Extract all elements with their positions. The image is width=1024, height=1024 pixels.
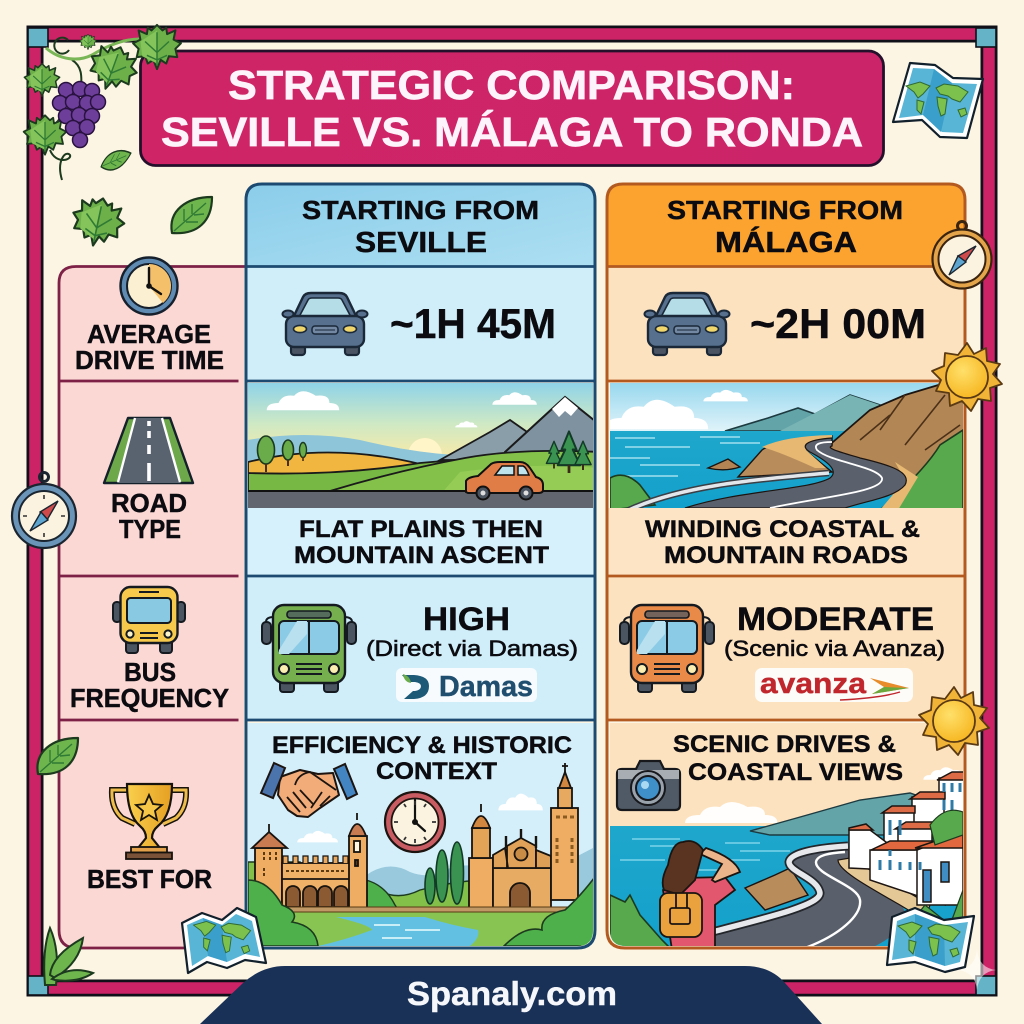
caption: flat plains then mountain ascent — [294, 516, 549, 569]
icon: camera — [617, 761, 680, 810]
icon: green bus — [262, 605, 356, 692]
scene: plains and mountains — [248, 383, 600, 508]
icon: yellow bus — [113, 587, 185, 653]
caption: scenic drives and coastal views: SCENIC DRIVES & — [673, 731, 896, 758]
heading: starting from Málaga: MÁLAGA — [715, 225, 857, 259]
panel: starting from Málaga — [605, 184, 970, 951]
icon: folded map bottom right — [887, 908, 974, 972]
value: moderate bus frequency: MODERATE — [737, 601, 934, 637]
icon: folded map top right — [893, 63, 983, 138]
row label: average drive time — [75, 321, 224, 375]
trees — [425, 842, 464, 904]
row label: bus frequency: FREQUENCY — [70, 685, 229, 713]
caption: winding coastal and mountain roads — [645, 516, 920, 569]
icon: grape leaf — [68, 193, 128, 251]
grape vine corner decoration — [24, 25, 181, 180]
value: moderate bus frequency: (Scenic via Avanza) — [724, 636, 945, 661]
value: high bus frequency: HIGH — [423, 601, 510, 637]
row labels panel — [59, 266, 245, 948]
scene: coastal viewpoint — [610, 723, 968, 951]
icon: clock — [120, 258, 178, 314]
footer: brand banner: Spanaly.com — [407, 975, 617, 1012]
icon: orange car — [466, 462, 543, 500]
heading: starting from Málaga — [667, 195, 903, 259]
icon: trophy — [112, 784, 186, 859]
icon: sun lower — [919, 687, 989, 755]
heading: starting from Seville: STARTING FROM — [302, 195, 539, 225]
icon: compass right — [932, 222, 992, 288]
logo: Damas — [396, 668, 537, 703]
icon: leaf on frame — [37, 738, 78, 774]
caption: efficiency and historic context: CONTEXT — [376, 758, 497, 785]
caption: scenic drives and coastal views: COASTAL VIEWS — [688, 759, 903, 786]
caption: scenic drives and coastal views — [673, 731, 903, 786]
icon: red clock — [385, 792, 445, 852]
landmark: palace with towers — [252, 813, 367, 908]
icon: orange bus — [620, 605, 714, 692]
row label: road type — [111, 490, 187, 544]
figure: traveller looking at the view — [660, 841, 740, 950]
heading: starting from Málaga: STARTING FROM — [667, 195, 903, 225]
title banner — [140, 51, 884, 166]
icon: road — [104, 418, 193, 483]
icon: leaves bottom left — [44, 928, 93, 985]
logo: Damas: Damas — [439, 671, 533, 703]
logo: avanza — [755, 668, 913, 702]
row label: bus frequency: BUS — [124, 659, 176, 687]
icon: compass left — [12, 472, 76, 548]
icon: handshake — [261, 763, 357, 817]
white village — [849, 772, 968, 905]
caption: efficiency and historic context: EFFICIENCY & HISTORIC — [272, 732, 572, 759]
scene: coastal mountain road — [605, 383, 970, 511]
row label: road type: ROAD — [111, 490, 187, 518]
footer: brand banner — [200, 966, 822, 1024]
heading: starting from Seville — [302, 195, 539, 259]
row label: road type: TYPE — [119, 516, 181, 544]
caption: winding coastal and mountain roads: WINDING COASTAL & — [645, 516, 920, 543]
row label: bus frequency — [70, 659, 229, 713]
value: drive time Málaga: ~2H 00M — [750, 300, 926, 347]
icon: car — [282, 293, 368, 355]
icon: car — [644, 293, 730, 355]
row label: average drive time: DRIVE TIME — [75, 347, 224, 375]
caption: efficiency and historic context — [272, 732, 572, 785]
value: high bus frequency — [366, 601, 578, 661]
landmark: cathedral and Giralda — [469, 763, 578, 908]
value: high bus frequency: (Direct via Damas) — [366, 636, 578, 661]
heading: starting from Seville: SEVILLE — [355, 227, 487, 259]
value: moderate bus frequency — [724, 601, 945, 661]
row label: average drive time: AVERAGE — [87, 321, 211, 349]
icon: small leaf — [101, 144, 131, 176]
value: drive time Seville: ~1H 45M — [390, 300, 556, 347]
caption: winding coastal and mountain roads: MOUNTAIN ROADS — [664, 542, 908, 569]
title banner: SEVILLE VS. MÁLAGA TO RONDA — [161, 109, 863, 155]
row label: best for: BEST FOR — [87, 866, 212, 894]
caption: flat plains then mountain ascent: MOUNTAIN ASCENT — [294, 542, 549, 569]
caption: flat plains then mountain ascent: FLAT PLAINS THEN — [299, 516, 543, 543]
icon: green leaf — [171, 197, 212, 233]
title banner: STRATEGIC COMPARISON: — [228, 62, 795, 108]
icon: sun upper — [932, 343, 1002, 411]
grape cluster — [52, 82, 106, 148]
panel: starting from Seville — [246, 184, 600, 948]
logo: avanza: avanza — [760, 668, 867, 700]
sparkle watermark — [958, 950, 996, 990]
scene: historic Seville — [248, 723, 600, 946]
icon: folded map bottom left — [182, 908, 266, 973]
